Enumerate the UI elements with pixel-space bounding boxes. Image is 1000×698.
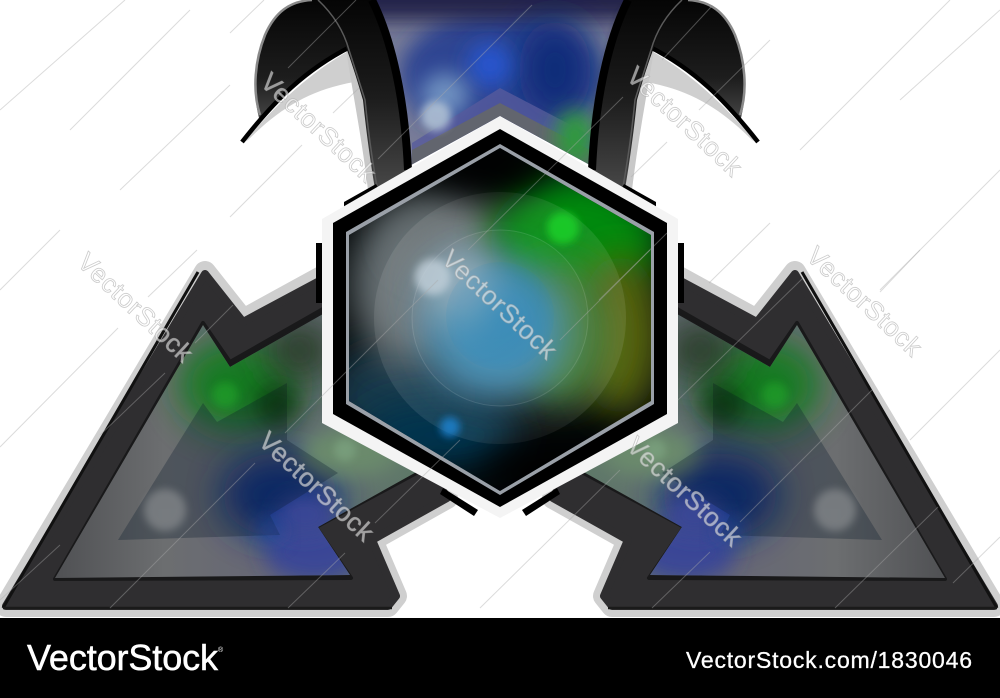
watermark text — [72, 60, 929, 553]
watermark text: VectorStock — [253, 425, 381, 548]
footer registered mark: ® — [218, 646, 224, 654]
left horn — [242, 0, 411, 195]
panel: central hexagon lens — [322, 116, 678, 518]
footer image url: VectorStock.com/1830046 — [686, 647, 972, 673]
footer bar — [0, 618, 1000, 698]
right horn — [589, 0, 758, 195]
watermark text: VectorStock — [72, 246, 200, 369]
watermark text: VectorStock — [436, 243, 564, 366]
watermark text: VectorStock — [621, 60, 749, 183]
panel: right triangle — [553, 272, 997, 608]
footer brand: VectorStock — [27, 637, 219, 678]
watermark text: VectorStock — [255, 66, 383, 189]
watermark text: VectorStock — [621, 430, 749, 553]
panel: top column with blue glow — [376, 0, 624, 165]
hexagon black offset strips — [316, 184, 684, 516]
watermark text: VectorStock — [801, 240, 929, 363]
panel: left triangle — [3, 272, 447, 608]
